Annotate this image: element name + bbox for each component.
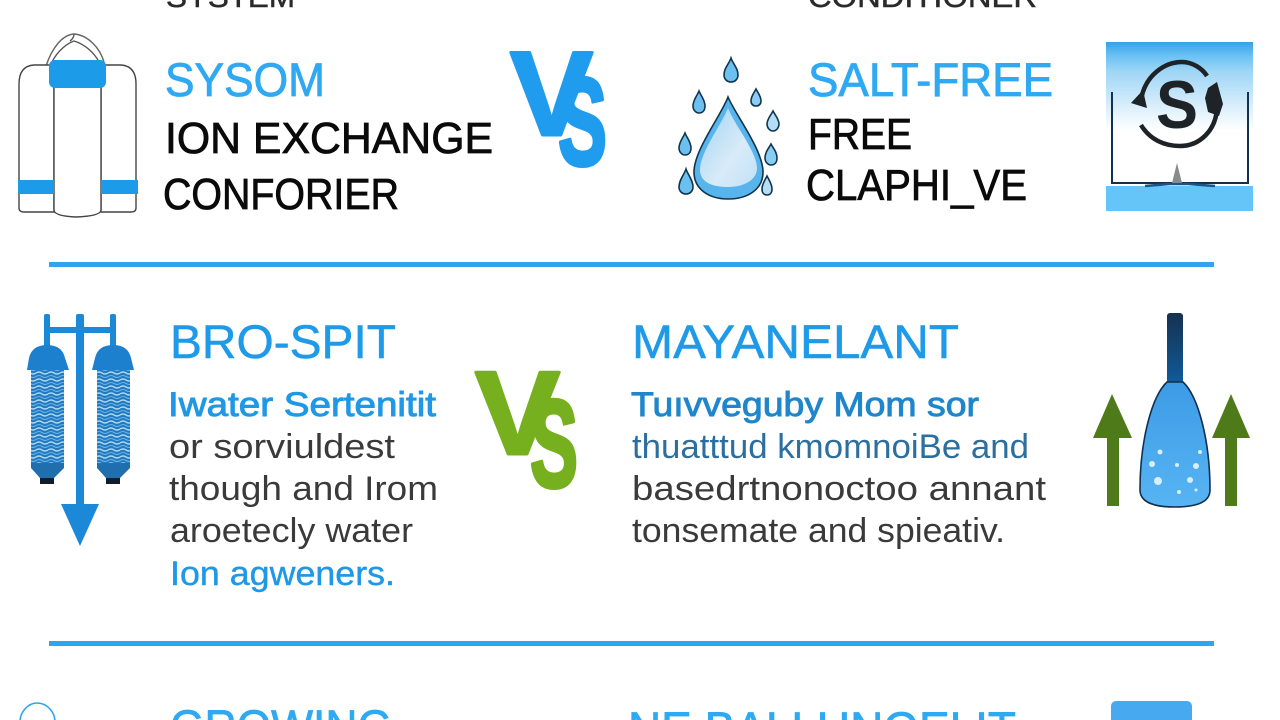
icon: bottle with green arrows [1093, 313, 1250, 507]
icon: filter cylinders and arrow [27, 314, 134, 546]
VS badge green: S [530, 376, 578, 514]
heading: BRO-SPIT: BRO-SPIT [170, 315, 396, 368]
icon: bottom right blue box [1111, 701, 1192, 720]
VS badge blue [510, 27, 607, 192]
text block: left description: or sorviuldest [169, 428, 396, 466]
text block: right description: thuatttud kmomnoiBe and [632, 428, 1029, 466]
text block: right description [631, 386, 1047, 550]
icon: ion exchange tanks [18, 34, 138, 217]
divider [49, 641, 1214, 646]
heading: ION EXCHANGE: ION EXCHANGE [165, 114, 493, 163]
icon: water drops [679, 58, 779, 199]
text block: left description: Ion agweners. [170, 555, 395, 593]
text block: left description: aroetecly water [170, 512, 413, 550]
heading: MAYANELANT: MAYANELANT [632, 315, 959, 368]
heading: CLAPHI_VE: CLAPHI_VE [806, 161, 1027, 210]
heading: SALT-FREE: SALT-FREE [808, 53, 1053, 106]
icon: bottom left partial outline [20, 703, 55, 720]
text block: right description: basedrtnonoctoo annant [632, 470, 1047, 508]
VS badge green: V [475, 347, 560, 480]
icon: salt-free S box [1106, 42, 1253, 211]
text block: right description: Tuıvveguby Mom sor [631, 386, 979, 424]
icon: salt-free S box: S [1156, 67, 1198, 143]
VS badge blue: V [510, 27, 593, 161]
text block: left description: though and Irom [169, 470, 438, 508]
text block: left description [168, 386, 438, 593]
heading: CONFORIER: CONFORIER [163, 170, 399, 219]
text block: right description: tonsemate and spieativ. [632, 512, 1005, 550]
text block: left description: Iwater Sertenitit [168, 386, 437, 424]
VS badge green [475, 347, 578, 514]
heading: FREE: FREE [808, 110, 912, 159]
heading: SYSOM: SYSOM [165, 53, 325, 106]
VS badge blue: S [558, 54, 607, 192]
divider [49, 262, 1214, 267]
